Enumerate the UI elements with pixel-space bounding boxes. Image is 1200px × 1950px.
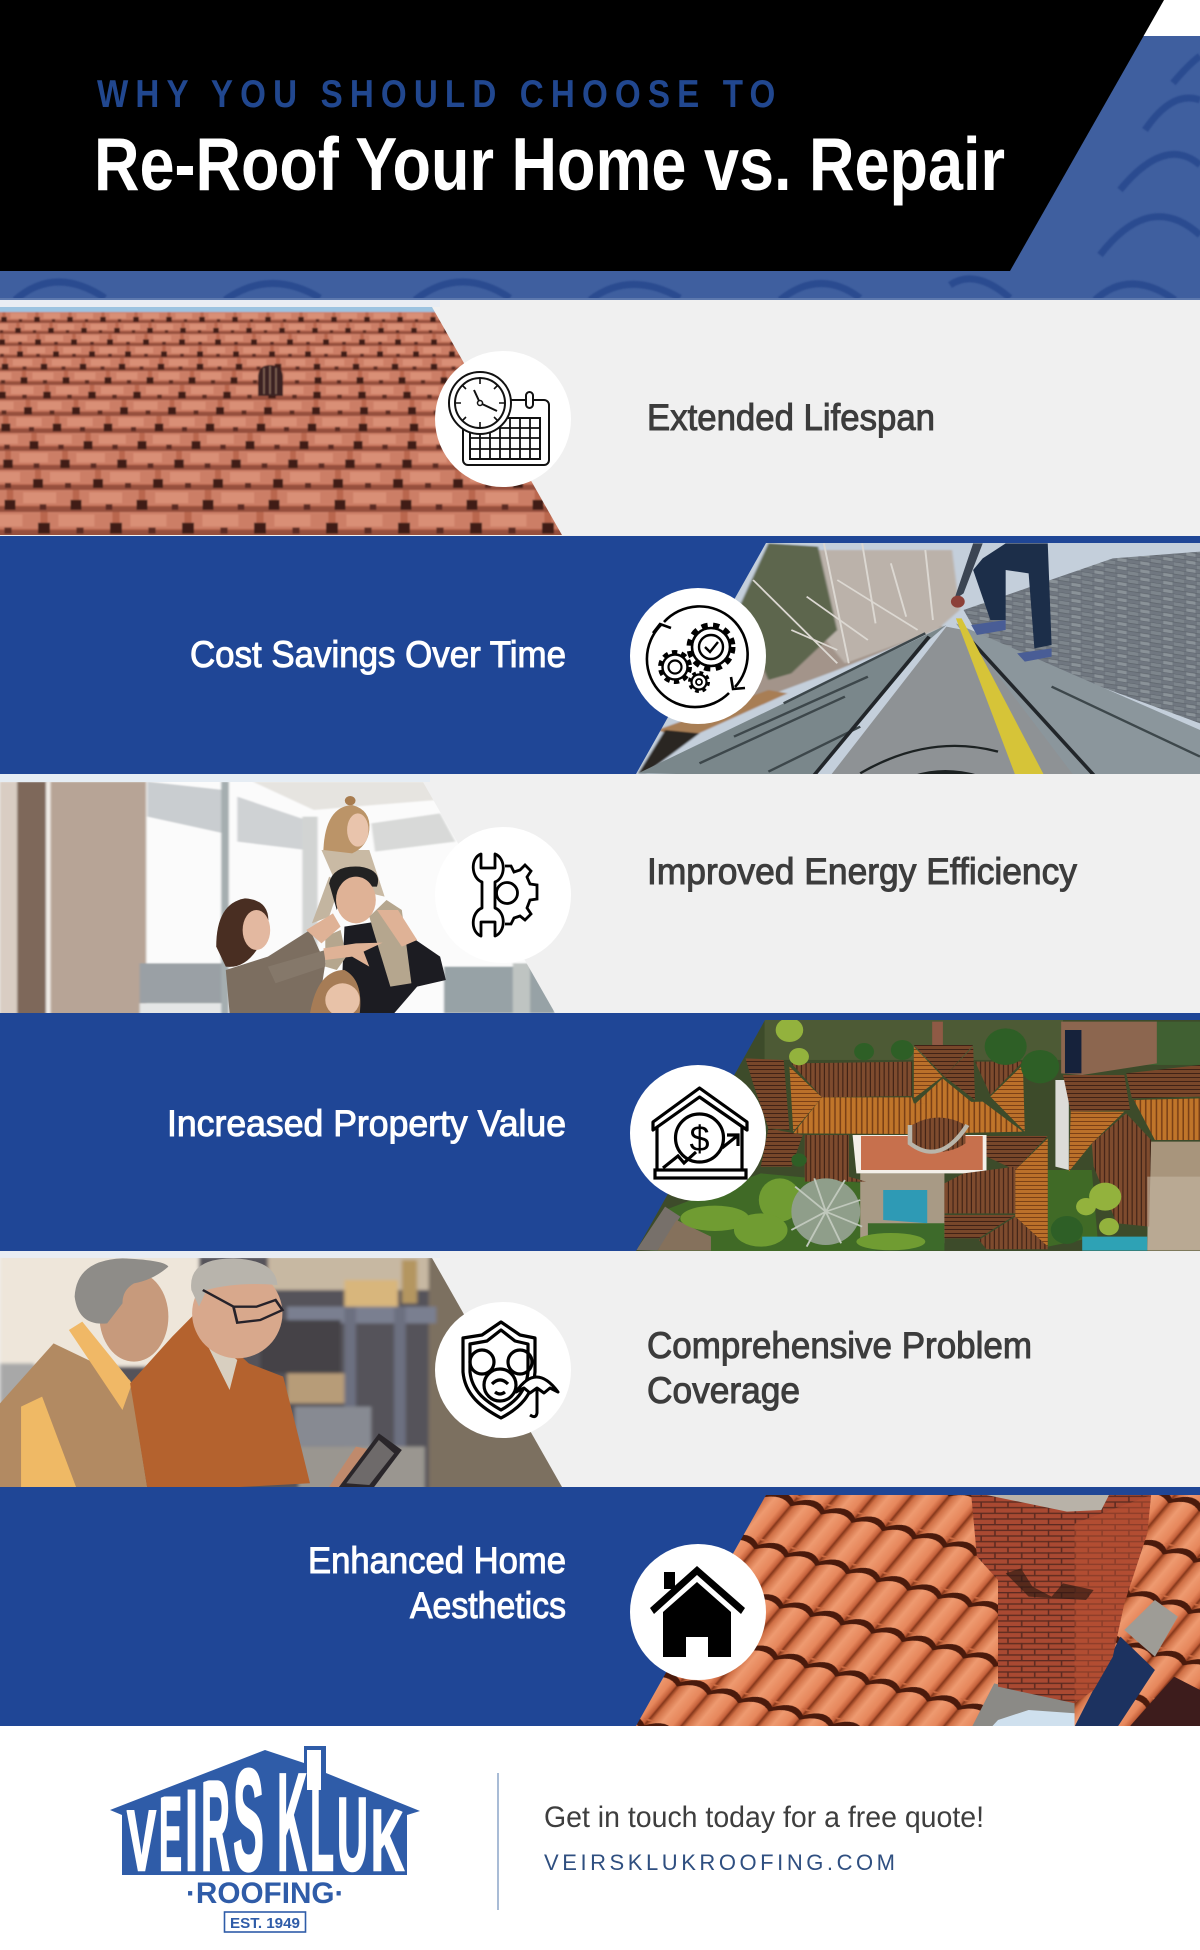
icon badge: house with dollar and growth arrow — [630, 1065, 766, 1201]
panel: cost savings — [0, 536, 1200, 780]
item label: Comprehensive Problem Coverage: Comprehensive Problem — [647, 1325, 1032, 1366]
footer logo: Veirs Kluk Roofing: K — [371, 1793, 404, 1889]
item label: Cost Savings Over Time: Cost Savings Over Time — [190, 634, 566, 675]
footer logo: Veirs Kluk Roofing: V — [127, 1794, 156, 1889]
icon badge: gears — [630, 588, 766, 724]
header black banner — [0, 0, 1164, 271]
photo: older couple with tablet — [0, 1257, 566, 1490]
photo: barrel tile roof with brick chimney — [630, 1490, 1200, 1730]
panel: energy efficiency — [0, 774, 1200, 1017]
eyebrow heading: WHY YOU SHOULD CHOOSE TO — [97, 71, 775, 116]
item label: Enhanced Home Aesthetics — [308, 1540, 566, 1626]
panel: home aesthetics — [0, 1487, 1200, 1730]
gear: small — [690, 674, 708, 690]
item label: Increased Property Value: Increased Property Value — [167, 1103, 566, 1144]
icon badge: protective shield with family and umbrella — [435, 1302, 571, 1438]
header band with tile pattern — [0, 36, 1200, 300]
icon: calendar — [463, 392, 549, 465]
item label: Extended Lifespan: Extended Lifespan — [647, 397, 935, 438]
footer divider — [497, 1773, 499, 1910]
call to action text: Get in touch today for a free quote! — [544, 1801, 984, 1834]
icon badge: clock and calendar — [435, 351, 571, 487]
photo: terracotta tile roof — [0, 302, 575, 538]
panel: property value — [0, 1013, 1200, 1252]
item label: Improved Energy Efficiency: Improved Energy Efficiency — [647, 851, 1077, 892]
footer logo: Veirs Kluk Roofing: U — [337, 1777, 368, 1893]
item label: Enhanced Home Aesthetics: Aesthetics — [410, 1585, 566, 1626]
main title: Re-Roof Your Home vs. Repair — [94, 122, 1005, 206]
gear: large with check — [690, 626, 732, 668]
footer logo: Veirs Kluk Roofing: R — [201, 1755, 230, 1898]
photo: roofer measuring shingles — [634, 540, 1200, 780]
photo: family at home — [0, 780, 563, 1017]
item label: Comprehensive Problem Coverage: Coverage — [647, 1370, 800, 1411]
item label: Enhanced Home Aesthetics: Enhanced Home — [308, 1540, 566, 1581]
footer logo: Veirs Kluk Roofing: L — [310, 1758, 334, 1897]
panel: comprehensive coverage — [0, 1251, 1200, 1490]
website address: VEIRSKLUKROOFING.COM — [544, 1850, 895, 1875]
icon badge: wrench and gear — [435, 827, 571, 963]
footer logo: Veirs Kluk Roofing — [110, 1739, 420, 1932]
footer logo: Veirs Kluk Roofing: S — [233, 1739, 264, 1901]
icon badge: solid house — [630, 1544, 766, 1680]
icon: clock — [449, 372, 511, 434]
footer logo: Veirs Kluk Roofing: ·ROOFING· — [186, 1875, 344, 1910]
item label: Comprehensive Problem Coverage — [647, 1325, 1032, 1411]
footer logo: Veirs Kluk Roofing: K — [277, 1745, 307, 1900]
umbrella — [516, 1377, 558, 1417]
footer logo: Veirs Kluk Roofing: EST. 1949 — [230, 1915, 300, 1932]
footer logo: Veirs Kluk Roofing: E — [159, 1776, 182, 1893]
photo: aerial view of tile-roof homes — [634, 1018, 1200, 1252]
gear: medium — [661, 653, 689, 681]
panel: extended lifespan — [0, 300, 1200, 538]
dollar sign: $ — [689, 1118, 710, 1159]
footer logo: Veirs Kluk Roofing: I — [185, 1767, 198, 1895]
